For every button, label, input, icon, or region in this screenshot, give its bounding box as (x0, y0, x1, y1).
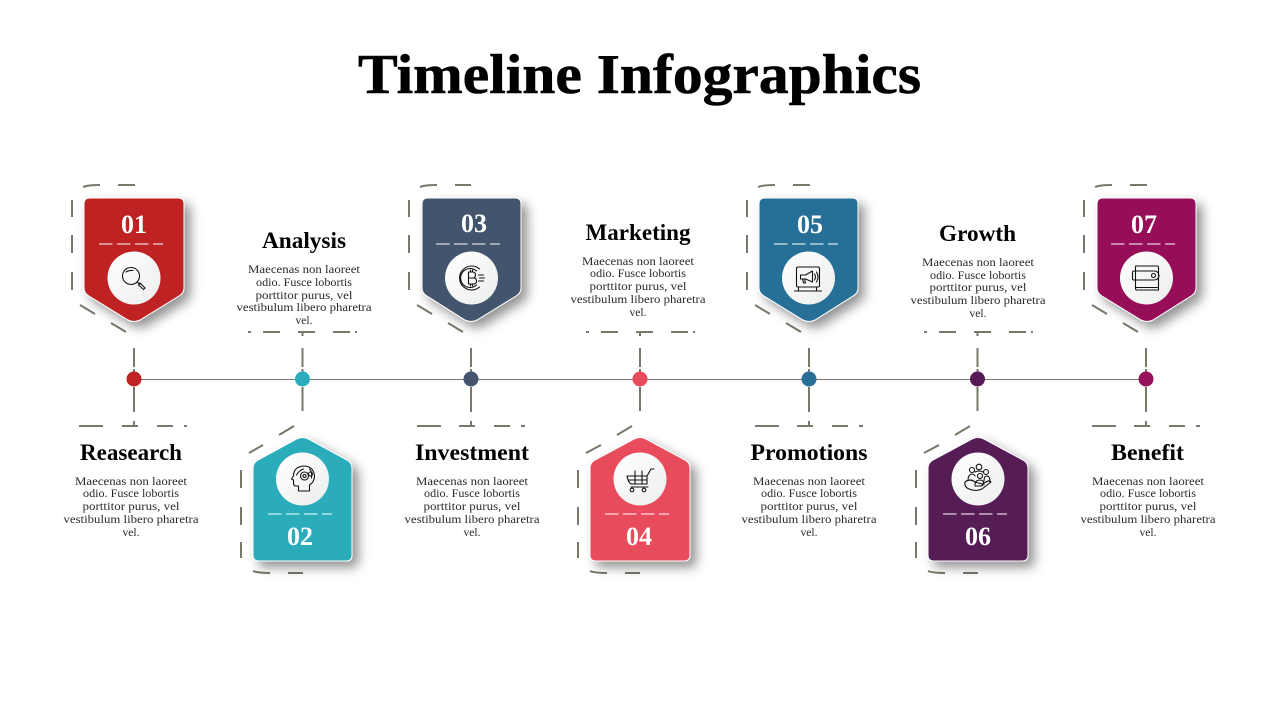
icon: magnifier (108, 252, 160, 304)
heading: Promotions: Promotions (750, 440, 868, 465)
text block: Analysis: odio. Fusce lobortis (256, 277, 353, 289)
text block: Reasearch: porttitor purus, vel (82, 501, 180, 513)
number 03: 03 (461, 209, 487, 238)
badge 07 (1097, 198, 1196, 322)
milestone dot 2 (295, 372, 310, 386)
badge 06 dashed outline (916, 332, 1033, 573)
text block: Growth: Maecenas non laoreet (922, 257, 1035, 269)
number 05: 05 (797, 210, 823, 239)
text block: Analysis: vestibulum libero pharetra (236, 302, 372, 314)
badge 03 (422, 198, 521, 322)
heading: Growth: Growth (939, 221, 1016, 246)
text block: Investment: vestibulum libero pharetra (404, 514, 540, 526)
badge 02 (253, 438, 352, 561)
text block: Promotions: vel. (800, 527, 818, 539)
text block: Benefit: odio. Fusce lobortis (1100, 488, 1197, 500)
step 02: Analysis (236, 228, 372, 573)
text block: Benefit (1080, 476, 1216, 539)
text block: Investment: vel. (464, 527, 481, 539)
text block: Reasearch (64, 476, 198, 539)
badge 06 (928, 438, 1028, 561)
text block: Marketing: vestibulum libero pharetra (570, 294, 706, 306)
badge 07 dashed outline (1084, 185, 1200, 426)
badge 05 dashed outline (747, 185, 863, 426)
title: Timeline Infographics (358, 44, 921, 106)
heading: Benefit: Benefit (1111, 440, 1184, 465)
text block: Investment: Maecenas non laoreet (416, 476, 529, 488)
milestone dot 4 (632, 372, 648, 386)
badge 03 dashed outline (409, 185, 525, 426)
number 07: 07 (1131, 210, 1157, 239)
badge 04 dashed outline (578, 332, 695, 573)
number 04: 04 (626, 522, 652, 551)
text block: Marketing: Maecenas non laoreet (582, 256, 695, 268)
text block: Growth (910, 257, 1046, 320)
text block: Growth: odio. Fusce lobortis (930, 270, 1027, 282)
icon: megaphone screen (782, 252, 835, 304)
text block: Growth: porttitor purus, vel (930, 282, 1026, 294)
milestone dot 1 (126, 372, 142, 386)
step 05: Promotions (742, 185, 876, 539)
number 06: 06 (965, 522, 991, 551)
text block: Marketing: vel. (630, 307, 647, 319)
text block: Investment: odio. Fusce lobortis (424, 488, 521, 500)
badge 01 dashed outline (72, 185, 187, 426)
text block: Investment (404, 476, 540, 539)
heading: Marketing: Marketing (586, 220, 691, 245)
milestone dot 6 (970, 372, 985, 386)
step 06: Growth (910, 221, 1046, 573)
text block: Growth: vestibulum libero pharetra (910, 295, 1046, 307)
icon: bitcoin (445, 252, 498, 304)
text block: Marketing: porttitor purus, vel (590, 281, 686, 293)
heading: Reasearch: Reasearch (80, 440, 182, 465)
text block: Reasearch: odio. Fusce lobortis (83, 488, 180, 500)
text block: Promotions: odio. Fusce lobortis (761, 488, 858, 500)
icon: wallet (1120, 252, 1173, 304)
badge 01 (84, 198, 184, 322)
badge 05 (759, 198, 858, 322)
text block: Benefit: vestibulum libero pharetra (1080, 514, 1216, 526)
icon: brain head (276, 452, 329, 506)
text block: Marketing (570, 256, 706, 319)
text block: Marketing: odio. Fusce lobortis (590, 268, 687, 280)
number 02: 02 (287, 522, 313, 551)
text block: Reasearch: vestibulum libero pharetra (64, 514, 198, 526)
number 01: 01 (121, 210, 147, 239)
text block: Analysis: vel. (296, 315, 313, 327)
step 07: Benefit (1080, 185, 1216, 539)
icon: shopping cart (614, 452, 666, 506)
text block: Investment: porttitor purus, vel (424, 501, 520, 513)
text block: Reasearch: Maecenas non laoreet (75, 476, 188, 488)
badge 04 (590, 438, 690, 561)
milestone dot 7 (1138, 372, 1154, 386)
text block: Analysis: Maecenas non laoreet (248, 264, 361, 276)
icon: people in hand (952, 452, 1004, 506)
text block: Promotions: porttitor purus, vel (760, 501, 858, 513)
heading: Analysis: Analysis (262, 228, 346, 253)
text block: Promotions (742, 476, 876, 539)
step 01: Research (64, 185, 198, 539)
step 04: Marketing (570, 220, 706, 573)
heading: Investment: Investment (415, 440, 529, 465)
text block: Analysis: porttitor purus, vel (256, 290, 352, 302)
text block: Analysis (236, 264, 372, 327)
timeline axis (126, 372, 1154, 386)
text block: Promotions: Maecenas non laoreet (753, 476, 866, 488)
step 03: Investment (404, 185, 540, 539)
text block: Growth: vel. (970, 308, 987, 320)
text block: Reasearch: vel. (122, 527, 140, 539)
milestone dot 5 (802, 372, 816, 386)
milestone dot 3 (464, 372, 478, 386)
text block: Benefit: vel. (1140, 527, 1157, 539)
badge 02 dashed outline (241, 332, 357, 573)
text block: Promotions: vestibulum libero pharetra (742, 514, 876, 526)
text block: Benefit: porttitor purus, vel (1100, 501, 1196, 513)
text block: Benefit: Maecenas non laoreet (1092, 476, 1205, 488)
